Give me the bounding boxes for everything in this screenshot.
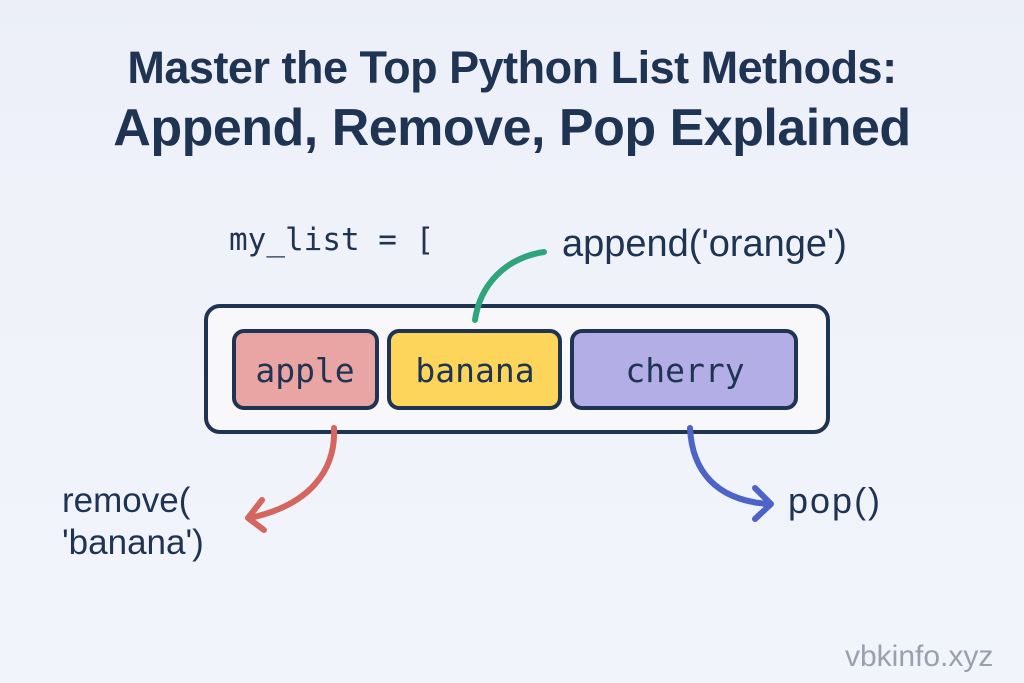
title: Append, Remove, Pop Explained: [113, 99, 911, 157]
label: remove: [62, 481, 204, 562]
label: remove: 'banana'): [62, 523, 204, 562]
label: pop: pop(): [788, 480, 882, 521]
arrow: remove (red): [248, 428, 334, 530]
list container: [206, 306, 828, 432]
item: apple: [234, 331, 377, 408]
item: banana: [389, 331, 560, 408]
label: remove: remove(: [62, 481, 190, 520]
title: Master the Top Python List Methods:: [127, 42, 897, 93]
arrow: pop (blue): [690, 428, 771, 519]
arrow: append (green): [475, 252, 544, 320]
item: apple: apple: [255, 351, 355, 390]
item: cherry: [572, 331, 796, 408]
item: banana: banana: [415, 351, 535, 390]
title: [113, 42, 911, 157]
label: append: append('orange'): [562, 223, 847, 265]
item: cherry: cherry: [625, 351, 745, 390]
code label: my_list: my_list = [: [229, 222, 434, 258]
watermark: vbkinfo.xyz: [845, 640, 993, 673]
